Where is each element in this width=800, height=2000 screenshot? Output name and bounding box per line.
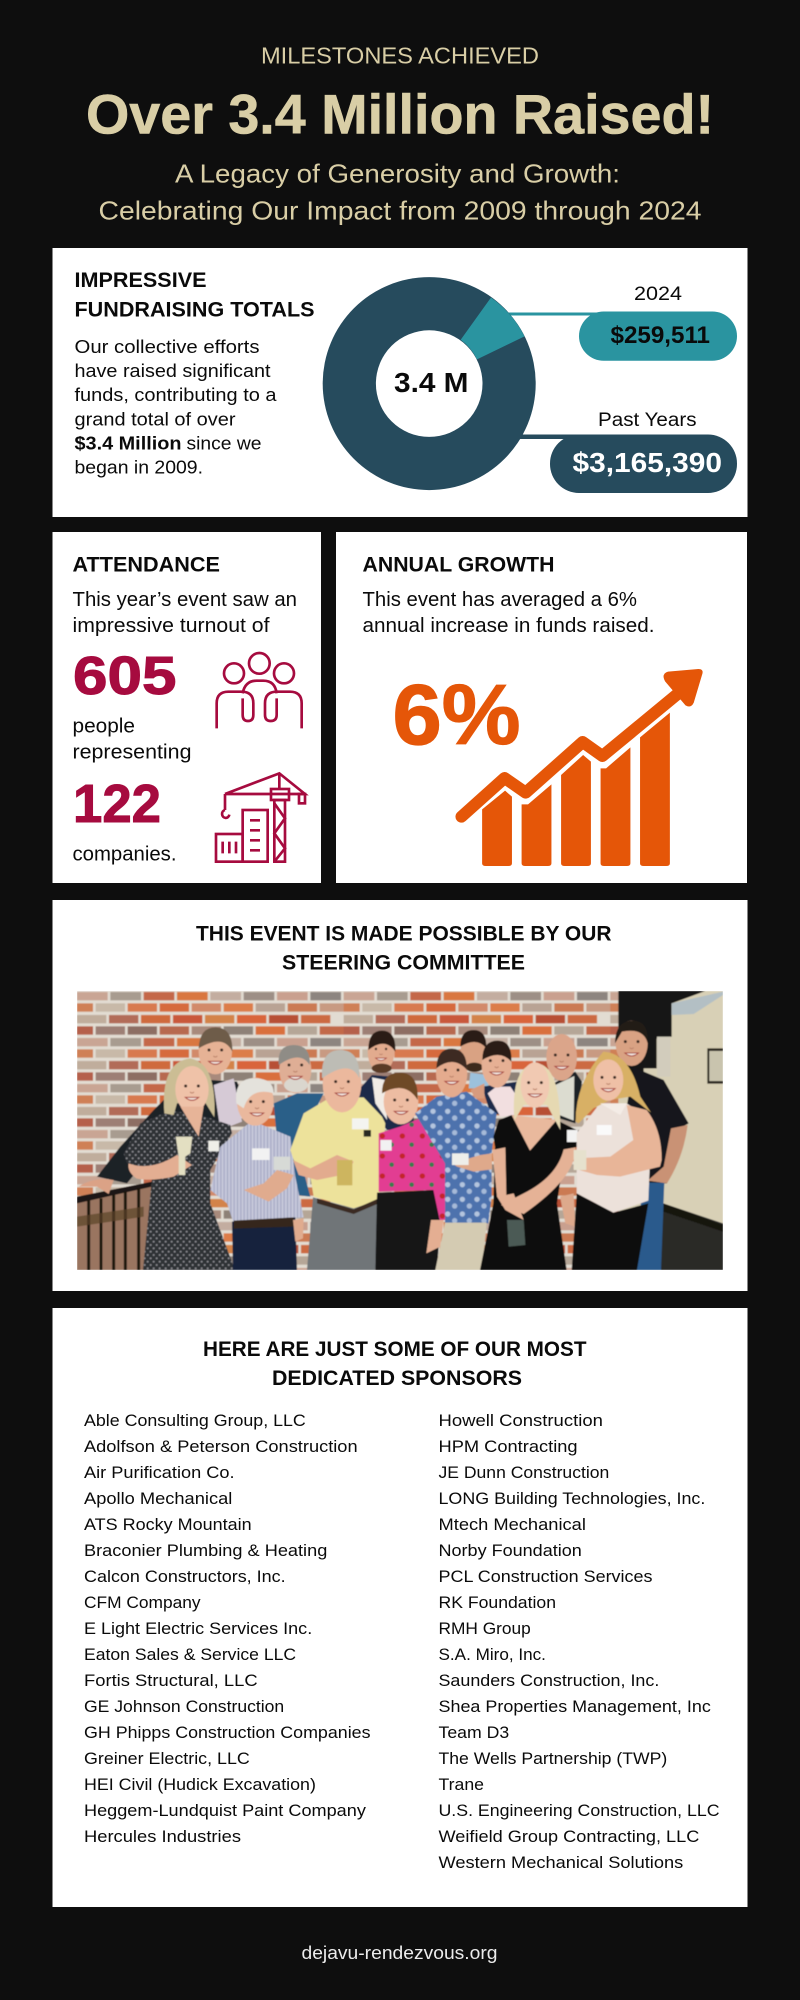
stat: 6%: 6% xyxy=(392,668,520,763)
icon: crane and buildings xyxy=(216,773,305,862)
photo: steering committee group xyxy=(77,991,723,1270)
sponsor list: right column: Saunders Construction, Inc. xyxy=(438,1671,659,1690)
sponsor list: right column: JE Dunn Construction xyxy=(438,1463,609,1482)
text: companies: companies. xyxy=(72,844,176,866)
subtitle xyxy=(98,158,702,226)
body text: began in 2009. xyxy=(74,456,203,478)
sponsor list: right column: Howell Construction xyxy=(438,1411,603,1430)
heading: attendance: ATTENDANCE xyxy=(72,554,220,576)
heading: steering committee: THIS EVENT IS MADE POSSIBLE BY OUR xyxy=(196,922,612,946)
sponsor list: left column: Eaton Sales & Service LLC xyxy=(84,1645,296,1664)
sponsor list: right column: S.A. Miro, Inc. xyxy=(438,1645,546,1664)
sponsor list: right column: Weifield Group Contracting, LLC xyxy=(438,1827,699,1846)
sponsor list: left column: Calcon Constructors, Inc. xyxy=(84,1567,286,1586)
sponsor list: left column: Braconier Plumbing & Heating xyxy=(84,1541,327,1560)
chart: rising bars with arrow xyxy=(461,669,703,866)
railing xyxy=(77,1182,152,1270)
sponsor list: left column xyxy=(84,1411,370,1846)
label: past years: Past Years xyxy=(598,410,696,431)
footer: website: dejavu-rendezvous.org xyxy=(302,1943,498,1963)
sponsor list: right column: Western Mechanical Solutions xyxy=(438,1853,683,1872)
description text xyxy=(362,589,654,637)
body text: $3.4 Million xyxy=(74,432,182,454)
description text: This event has averaged a 6% xyxy=(362,589,637,611)
sponsor list: right column: Norby Foundation xyxy=(438,1541,582,1560)
bars xyxy=(482,713,670,866)
sponsor list: right column: Team D3 xyxy=(438,1723,509,1742)
subtitle: Celebrating Our Impact from 2009 through 2024 xyxy=(98,196,702,226)
heading: steering committee xyxy=(196,922,612,974)
front row people xyxy=(124,1049,662,1270)
pill: past years amount xyxy=(550,434,737,493)
text: people representing: people xyxy=(72,716,135,738)
sponsor list: left column: E Light Electric Services Inc. xyxy=(84,1619,312,1638)
sponsor list: left column: Able Consulting Group, LLC xyxy=(84,1411,306,1430)
sponsor list: left column: Heggem-Lundquist Paint Company xyxy=(84,1801,366,1820)
text: people representing xyxy=(72,716,192,764)
intro text: impressive turnout of xyxy=(72,615,270,637)
woman in pink blouse xyxy=(379,1118,448,1220)
connector lines xyxy=(500,312,600,439)
sponsor list: right column: Shea Properties Management, Inc xyxy=(438,1697,711,1716)
description text: annual increase in funds raised. xyxy=(362,615,654,637)
body text: funds, contributing to a xyxy=(74,384,277,405)
sponsor list: left column: HEI Civil (Hudick Excavation) xyxy=(84,1775,316,1794)
heading: impressive fundraising totals xyxy=(74,269,314,322)
eyebrow: milestones achieved: MILESTONES ACHIEVED xyxy=(261,42,539,68)
woman in black dress xyxy=(480,1115,578,1270)
panel: steering committee xyxy=(52,900,748,1291)
heading: steering committee: STEERING COMMITTEE xyxy=(282,952,525,974)
stat: 605: 605 xyxy=(73,646,176,706)
sponsor list: right column: HPM Contracting xyxy=(438,1437,578,1456)
sponsor list: right column: Mtech Mechanical xyxy=(438,1515,586,1534)
pill: 2024 amount: $259,511 xyxy=(610,322,710,349)
body text: Our collective efforts xyxy=(74,336,260,357)
pill: 2024 amount xyxy=(579,312,737,361)
woman in patterned dress xyxy=(124,1111,234,1270)
woman in white top xyxy=(560,1193,575,1227)
heading: dedicated sponsors: HERE ARE JUST SOME OF OUR MOST xyxy=(203,1338,587,1361)
sponsor list: right column: RK Foundation xyxy=(438,1593,556,1612)
heading: dedicated sponsors xyxy=(203,1338,587,1390)
panel: attendance xyxy=(52,532,321,883)
back row people xyxy=(79,1021,689,1270)
sponsor list: left column: ATS Rocky Mountain xyxy=(84,1515,252,1534)
heading: dedicated sponsors: DEDICATED SPONSORS xyxy=(272,1367,522,1390)
donut centre value: 3.4 M xyxy=(394,367,468,398)
body text: grand total of over xyxy=(74,408,236,430)
sponsor list: right column: LONG Building Technologies, Inc. xyxy=(438,1489,705,1508)
body text xyxy=(74,336,277,478)
sponsor list: left column: CFM Company xyxy=(84,1593,201,1612)
sponsor list: left column: Fortis Structural, LLC xyxy=(84,1671,258,1690)
panel: sponsors xyxy=(52,1308,748,1907)
sponsor list: right column: U.S. Engineering Construction, LLC xyxy=(438,1801,720,1820)
stat: 122: 122 xyxy=(73,774,161,834)
icon: people group xyxy=(217,653,302,728)
sponsor list: left column: GH Phipps Construction Companies xyxy=(84,1723,370,1742)
donut chart xyxy=(323,277,536,490)
sponsor list: right column: Trane xyxy=(438,1775,484,1794)
heading: annual growth: ANNUAL GROWTH xyxy=(362,554,554,576)
sponsor list: left column: GE Johnson Construction xyxy=(84,1697,284,1716)
sponsor list: left column: Apollo Mechanical xyxy=(84,1489,232,1508)
heading: impressive fundraising totals: IMPRESSIVE xyxy=(74,269,206,292)
man in blue floral shirt xyxy=(415,1092,497,1223)
man in yellow polo xyxy=(290,1097,385,1208)
panel: fundraising totals xyxy=(52,248,748,517)
brick wall and room xyxy=(77,991,723,1270)
man in striped shirt xyxy=(210,1121,304,1223)
body text: since we xyxy=(186,432,262,454)
subtitle: A Legacy of Generosity and Growth: xyxy=(175,158,620,188)
text: people representing: representing xyxy=(72,742,192,764)
header xyxy=(86,42,714,226)
sponsor list: left column: Hercules Industries xyxy=(84,1827,241,1846)
sponsor list: left column: Air Purification Co. xyxy=(84,1463,235,1482)
sponsor list: right column xyxy=(438,1411,720,1872)
sponsor list: right column: The Wells Partnership (TWP) xyxy=(438,1749,667,1768)
pill: past years amount: $3,165,390 xyxy=(572,447,722,478)
heading: impressive fundraising totals: FUNDRAISING TOTALS xyxy=(74,298,314,322)
sponsor list: left column: Adolfson & Peterson Construction xyxy=(84,1437,358,1456)
donut segment: 2024 xyxy=(461,298,524,359)
body text: have raised significant xyxy=(74,360,270,381)
sponsor list: right column: PCL Construction Services xyxy=(438,1567,652,1586)
intro text: This year’s event saw an xyxy=(72,589,297,611)
panel: annual growth xyxy=(336,532,747,883)
title: Over 3.4 Million Raised! xyxy=(86,82,714,146)
arrow xyxy=(461,669,703,817)
intro text xyxy=(72,589,297,637)
sponsor list: right column: RMH Group xyxy=(438,1619,531,1638)
label: 2024: 2024 xyxy=(634,284,682,305)
sponsor list: left column: Greiner Electric, LLC xyxy=(84,1749,250,1768)
